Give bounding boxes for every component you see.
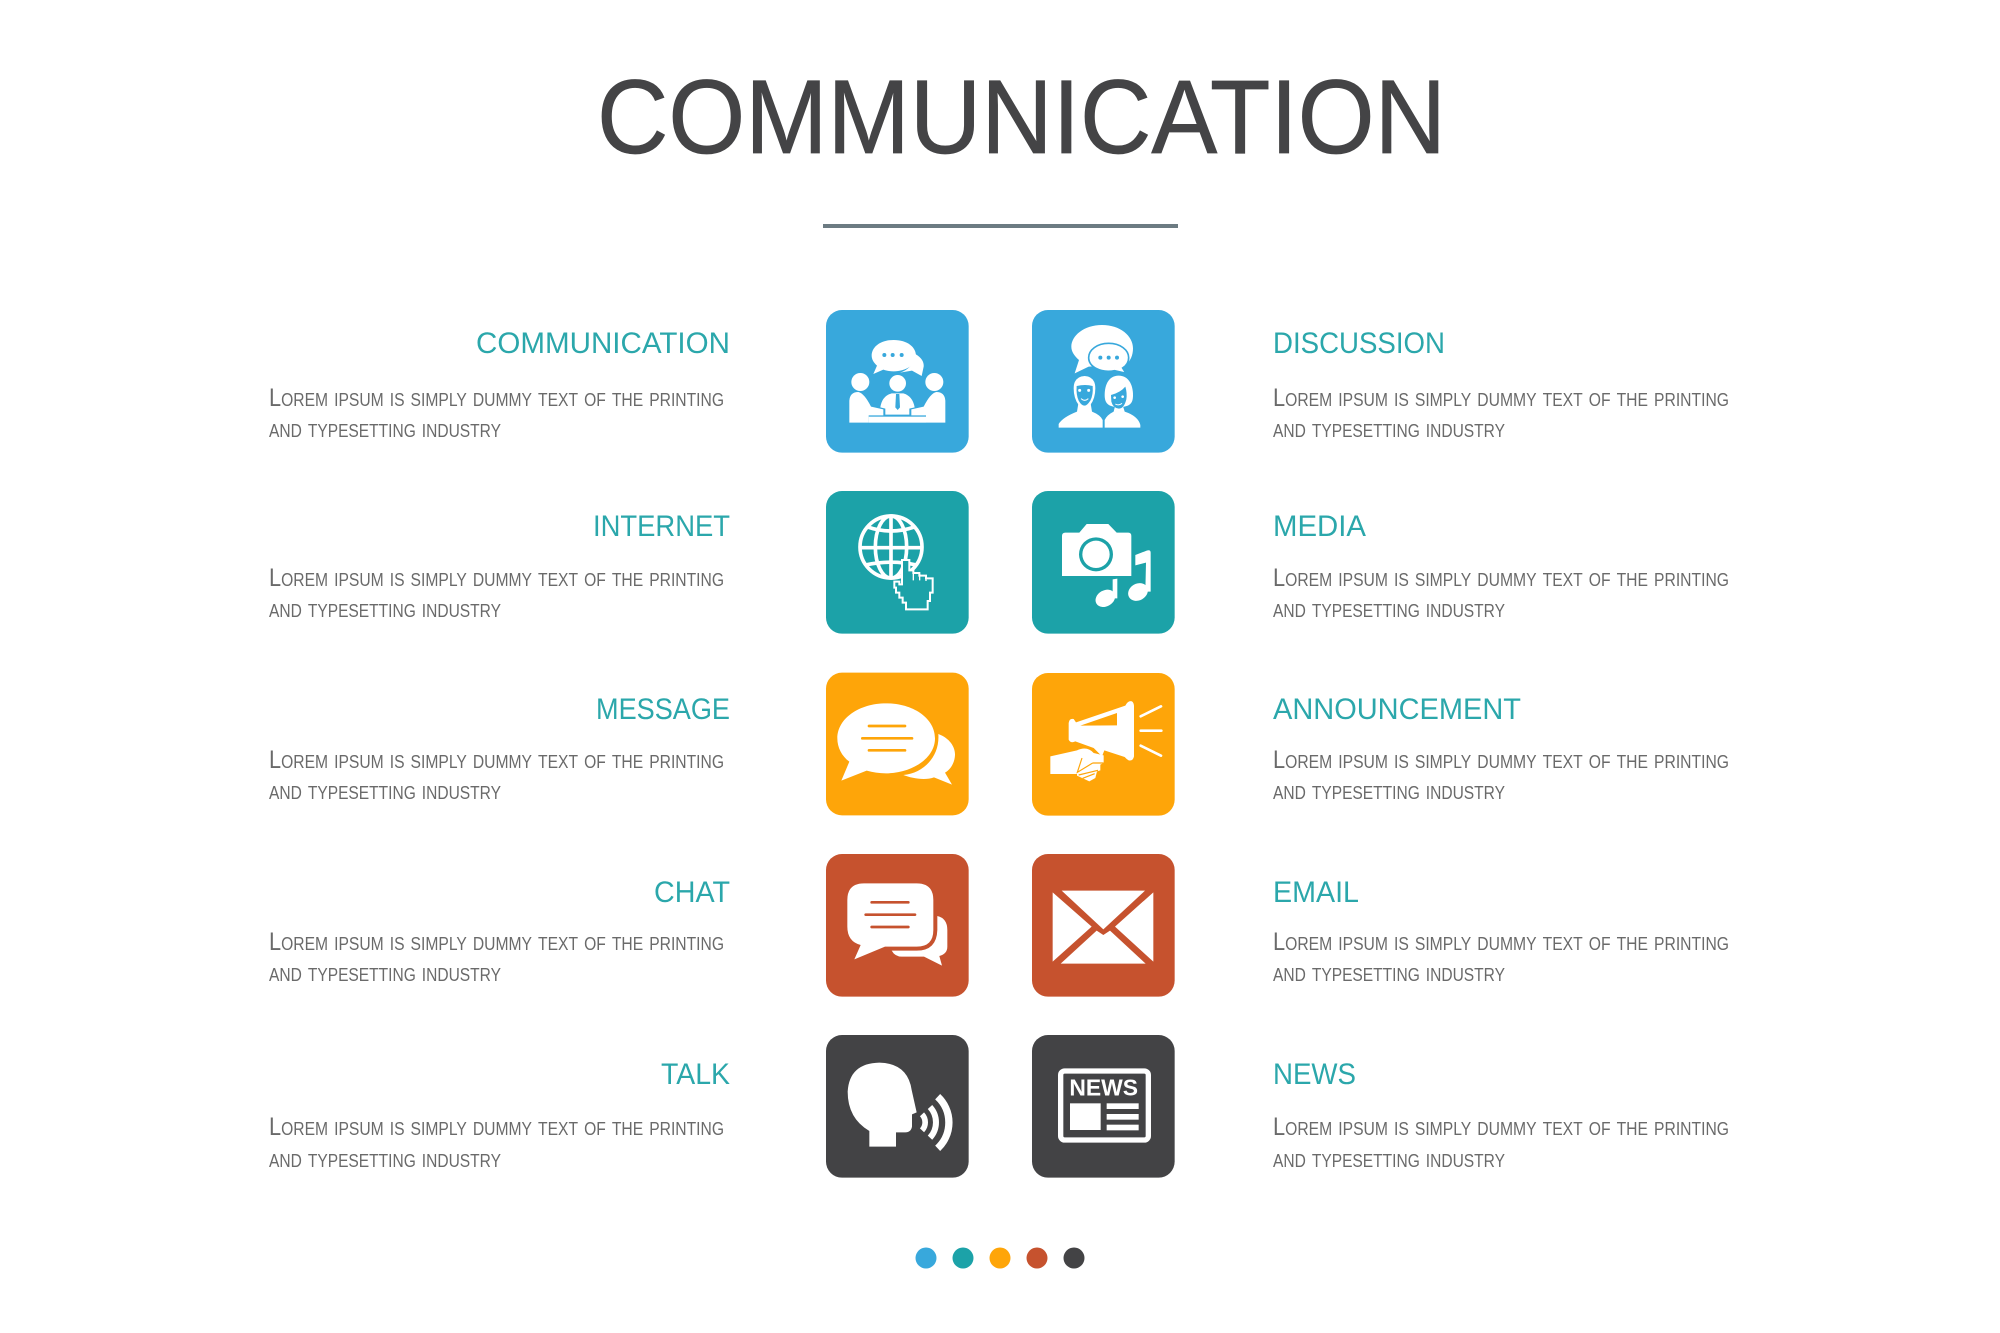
heading: talk: TALK: [661, 1058, 730, 1091]
heading: media: MEDIA: [1273, 510, 1366, 543]
description: message: Lorem ipsum is simply dummy text of the printing: [269, 746, 724, 774]
icon: meeting group: [826, 310, 969, 453]
description: discussion: [1273, 384, 1729, 443]
colour dots: [916, 1248, 1084, 1268]
icon: speaking head: [826, 1035, 969, 1178]
heading: email: EMAIL: [1273, 876, 1359, 909]
description: chat: [269, 928, 724, 987]
description: news: and typesetting industry: [1273, 1145, 1505, 1173]
icon: globe with pointer: [826, 491, 969, 634]
icon: camera and music notes: [1032, 491, 1175, 634]
icon: envelope: [1032, 854, 1175, 997]
icon: newspaper: [1032, 1035, 1175, 1178]
icon: discussion couple: [1032, 310, 1175, 453]
panel: email text: [1273, 876, 1729, 987]
description: media: [1273, 564, 1729, 623]
heading: communication: COMMUNICATION: [476, 327, 730, 360]
panel: media text: [1273, 510, 1729, 623]
heading: internet: INTERNET: [593, 510, 730, 543]
title: COMMUNICATION: [597, 59, 1446, 176]
heading: discussion: DISCUSSION: [1273, 327, 1445, 360]
description: communication: and typesetting industry: [269, 415, 501, 443]
description: discussion: Lorem ipsum is simply dummy text of the printing: [1273, 384, 1729, 412]
description: talk: and typesetting industry: [269, 1145, 501, 1173]
description: internet: [269, 564, 724, 623]
panel: communication text: [269, 327, 730, 443]
icon: message bubbles: [826, 673, 969, 815]
description: email: and typesetting industry: [1273, 959, 1505, 987]
icon: newspaper: NEWS: [1069, 1075, 1138, 1101]
description: media: Lorem ipsum is simply dummy text of the printing: [1273, 564, 1729, 592]
description: email: Lorem ipsum is simply dummy text of the printing: [1273, 928, 1729, 956]
panel: message text: [269, 693, 730, 805]
panel: news text: [1273, 1058, 1729, 1173]
description: message: and typesetting industry: [269, 777, 501, 805]
description: media: and typesetting industry: [1273, 595, 1505, 623]
panel: announcement text: [1273, 693, 1729, 805]
description: chat: Lorem ipsum is simply dummy text of the printing: [269, 928, 724, 956]
description: announcement: and typesetting industry: [1273, 777, 1505, 805]
icon: chat bubbles: [826, 854, 969, 997]
description: internet: and typesetting industry: [269, 595, 501, 623]
heading: announcement: ANNOUNCEMENT: [1273, 693, 1521, 726]
panel: internet text: [269, 510, 730, 623]
description: announcement: [1273, 746, 1729, 805]
description: discussion: and typesetting industry: [1273, 415, 1505, 443]
description: news: Lorem ipsum is simply dummy text of the printing: [1273, 1113, 1729, 1141]
description: announcement: Lorem ipsum is simply dummy text of the printing: [1273, 746, 1729, 774]
description: chat: and typesetting industry: [269, 959, 501, 987]
description: internet: Lorem ipsum is simply dummy text of the printing: [269, 564, 724, 592]
description: communication: [269, 384, 724, 443]
panel: chat text: [269, 876, 730, 987]
heading: news: NEWS: [1273, 1058, 1356, 1091]
description: news: [1273, 1113, 1729, 1173]
description: email: [1273, 928, 1729, 987]
description: talk: Lorem ipsum is simply dummy text of the printing: [269, 1113, 724, 1141]
description: message: [269, 746, 724, 805]
heading: chat: CHAT: [654, 876, 730, 909]
heading: message: MESSAGE: [596, 693, 730, 726]
description: communication: Lorem ipsum is simply dummy text of the printing: [269, 384, 724, 412]
panel: discussion text: [1273, 327, 1729, 443]
description: talk: [269, 1113, 724, 1173]
icon: megaphone in hand: [1032, 673, 1175, 816]
panel: talk text: [269, 1058, 730, 1173]
